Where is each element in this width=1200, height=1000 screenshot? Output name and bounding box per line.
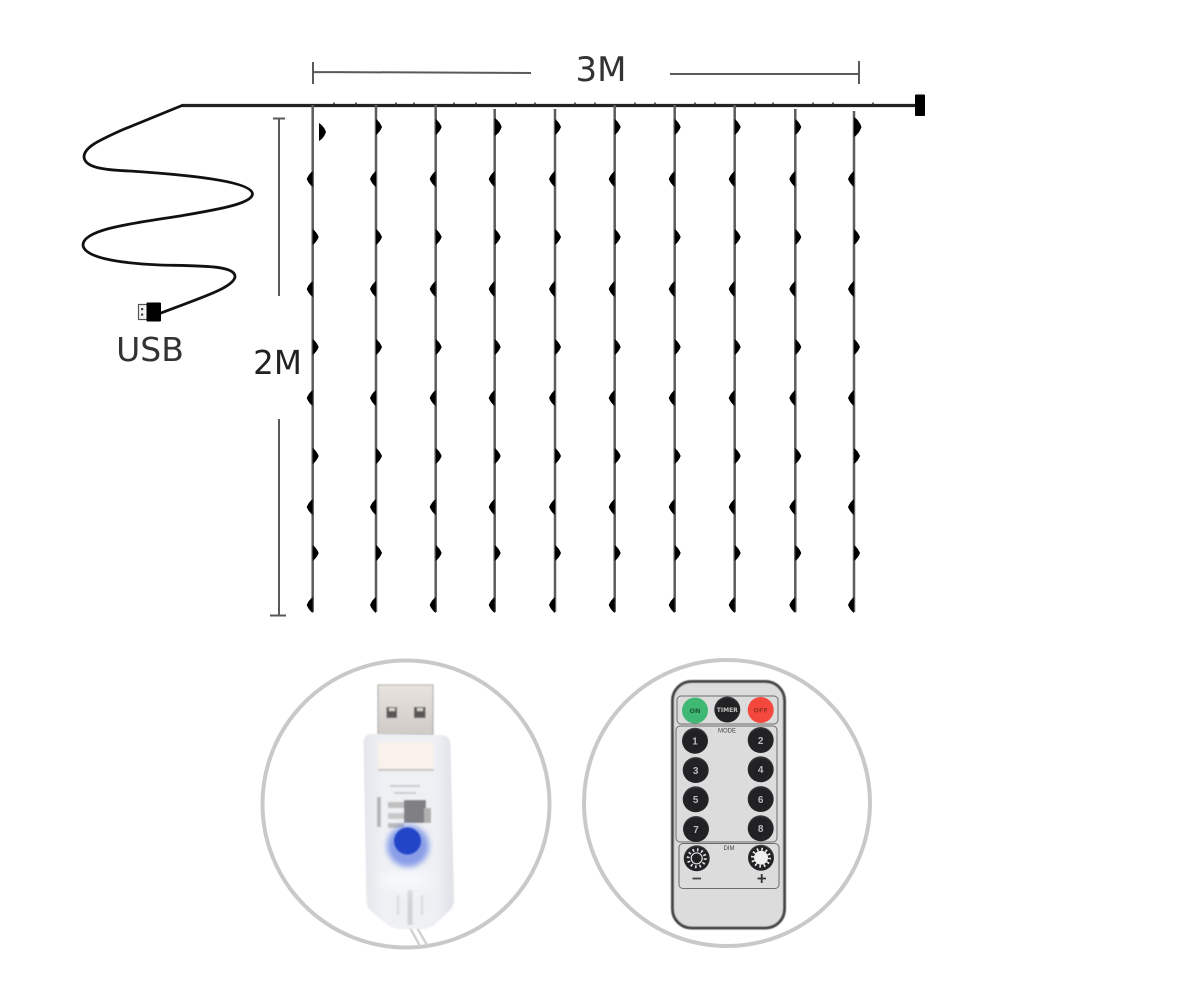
TIMER button bbox=[714, 696, 740, 722]
strand 3 bbox=[430, 105, 442, 613]
cable bbox=[409, 926, 427, 946]
DIM label: DIM bbox=[724, 846, 734, 852]
button 6: 6 bbox=[758, 795, 764, 806]
button 2 bbox=[748, 727, 774, 753]
button 5 bbox=[683, 786, 709, 812]
button 5: 5 bbox=[693, 795, 699, 806]
2M height dimension bbox=[253, 118, 302, 616]
light curtain strands bbox=[307, 105, 862, 613]
ON button bbox=[682, 698, 708, 724]
button 3: 3 bbox=[693, 766, 699, 777]
strand 2 bbox=[370, 105, 382, 613]
button 7: 7 bbox=[693, 825, 699, 836]
3M width dimension: 3M bbox=[576, 50, 626, 90]
USB label: USB bbox=[116, 330, 184, 369]
button 4: 4 bbox=[758, 765, 764, 776]
button panels bbox=[676, 696, 779, 888]
button 8 bbox=[748, 815, 774, 841]
blue glow bbox=[387, 825, 429, 867]
dim up button bbox=[748, 845, 774, 871]
top wire with end cap bbox=[182, 94, 925, 116]
strand 1 bbox=[307, 105, 326, 613]
strand 10 bbox=[848, 111, 862, 613]
strand 6 bbox=[609, 105, 621, 613]
OFF button bbox=[748, 697, 774, 723]
translucent controller housing bbox=[364, 734, 454, 929]
strand 7 bbox=[669, 105, 681, 613]
button 7 bbox=[683, 816, 709, 842]
TIMER button: TIMER bbox=[717, 707, 738, 714]
button 6 bbox=[748, 786, 774, 812]
blue button bbox=[394, 828, 421, 854]
plus sign bbox=[758, 874, 766, 883]
button 1 bbox=[682, 728, 708, 754]
icon: USB plug bbox=[138, 302, 161, 322]
strand 9 bbox=[789, 109, 801, 613]
USB cable bbox=[83, 106, 252, 313]
USB metal connector bbox=[378, 685, 433, 735]
strand 5 bbox=[549, 109, 561, 613]
button 4 bbox=[748, 756, 774, 782]
strand 8 bbox=[729, 105, 741, 613]
minus sign bbox=[692, 878, 701, 880]
soft highlight bbox=[379, 871, 431, 889]
panel: USB controller circle bbox=[262, 660, 550, 948]
button 1: 1 bbox=[692, 736, 698, 748]
remote body bbox=[672, 682, 784, 928]
3M width dimension bbox=[313, 50, 859, 90]
strand 4 bbox=[489, 109, 502, 613]
button 3 bbox=[683, 757, 709, 783]
ON button: ON bbox=[690, 707, 700, 715]
2M height dimension: 2M bbox=[253, 344, 302, 382]
MODE label: MODE bbox=[718, 728, 736, 734]
button 2: 2 bbox=[758, 736, 764, 747]
button 8: 8 bbox=[758, 824, 764, 835]
panel: remote control circle bbox=[584, 660, 870, 946]
dim down button bbox=[684, 845, 710, 871]
OFF button: OFF bbox=[753, 706, 768, 714]
